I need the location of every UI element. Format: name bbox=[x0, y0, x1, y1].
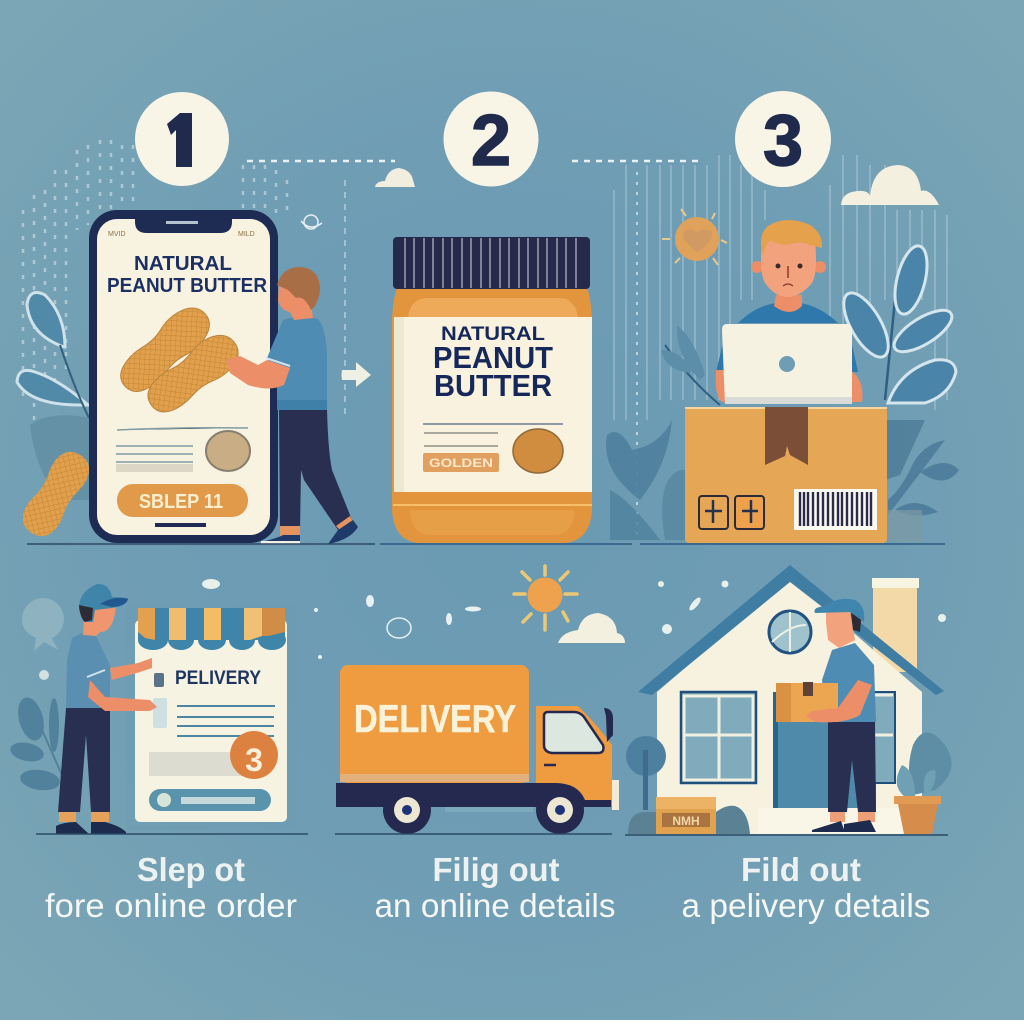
plant bbox=[9, 695, 62, 793]
coin bbox=[206, 431, 250, 471]
person at laptop bbox=[716, 220, 862, 402]
ground line bbox=[625, 834, 948, 836]
step number 1 bbox=[135, 92, 229, 186]
line backdrop: step 3 bbox=[614, 155, 947, 420]
jar label text: PEANUT bbox=[433, 340, 553, 375]
delivery person with parcel bbox=[776, 599, 876, 832]
truck bbox=[336, 665, 619, 834]
caption: Slep ot bbox=[137, 851, 245, 888]
icon: peanut on ground bbox=[16, 445, 96, 543]
phone: NATURAL bbox=[134, 253, 232, 275]
caption: fore online order bbox=[45, 887, 297, 924]
dashed connector: 1 to 2 bbox=[247, 160, 395, 162]
bushes bbox=[712, 806, 750, 834]
potted plant bbox=[894, 732, 952, 834]
ground line bbox=[380, 543, 632, 545]
button bbox=[117, 484, 248, 517]
peanuts bbox=[111, 299, 218, 400]
doodles bbox=[39, 579, 322, 680]
step number 3 bbox=[735, 91, 831, 187]
icon: cloud bbox=[841, 165, 939, 205]
icon: sun bbox=[662, 209, 727, 265]
phone: PEANUT BUTTER bbox=[107, 275, 268, 297]
step number 2: 2 bbox=[471, 101, 511, 181]
arrow bbox=[342, 362, 371, 387]
doodles bbox=[366, 595, 481, 638]
caption: Filig out bbox=[432, 851, 560, 888]
dotted backdrop: step 1 bbox=[23, 140, 287, 420]
speech bubble bbox=[22, 598, 64, 651]
person with phone bbox=[226, 267, 358, 544]
ground line bbox=[27, 543, 375, 545]
caption bbox=[374, 851, 616, 924]
tree bbox=[626, 736, 688, 834]
description lines bbox=[116, 428, 248, 462]
jar body bbox=[392, 287, 592, 543]
panel: step 5 delivery truck bbox=[335, 566, 625, 924]
caption: Fild out bbox=[741, 851, 861, 888]
icon: small cloud bbox=[375, 168, 415, 187]
jar label text: NATURAL bbox=[441, 324, 545, 345]
ground line bbox=[335, 833, 612, 835]
step number 2 bbox=[444, 92, 538, 186]
jar lid bbox=[393, 237, 590, 289]
order card: 3 bbox=[245, 742, 263, 778]
jar label text: BUTTER bbox=[434, 368, 552, 403]
panel: step 6 house delivery bbox=[625, 565, 952, 924]
caption: a pelivery details bbox=[682, 887, 930, 924]
caption: an online details bbox=[374, 887, 616, 924]
dashed vertical guide right bbox=[636, 172, 638, 540]
doodles bbox=[658, 580, 946, 634]
jar label details bbox=[423, 424, 563, 473]
caption bbox=[682, 851, 930, 924]
box bbox=[685, 407, 887, 543]
phone bbox=[89, 210, 278, 543]
order card: PELIVERY bbox=[175, 668, 261, 689]
step number 3: 3 bbox=[763, 101, 803, 181]
dashed connector: 2 to 3 bbox=[572, 160, 700, 162]
crate: NMH bbox=[672, 814, 700, 828]
icon: cloud bbox=[558, 613, 625, 643]
dashed vertical guide bbox=[344, 180, 346, 420]
ground line bbox=[640, 543, 945, 545]
panel: step 1 phone order bbox=[16, 210, 375, 544]
house bbox=[638, 565, 944, 834]
chimney bbox=[872, 578, 919, 672]
laptop bbox=[722, 324, 852, 404]
phone: MVID bbox=[108, 231, 126, 238]
icon: sun bbox=[514, 566, 577, 630]
panel: step 3 person with box bbox=[606, 165, 959, 544]
panel: step 4 delivery man with order card bbox=[9, 579, 322, 924]
order card bbox=[126, 605, 296, 830]
delivery person bbox=[56, 584, 157, 834]
truck: DELIVERY bbox=[354, 698, 516, 741]
plants bbox=[606, 243, 959, 542]
caption bbox=[45, 851, 297, 924]
jar label text bbox=[433, 324, 553, 403]
plant behind phone bbox=[17, 293, 90, 500]
jar label details: GOLDEN bbox=[429, 456, 493, 470]
panel: step 2 jar bbox=[380, 237, 632, 544]
icon: doodle bbox=[301, 215, 322, 229]
phone: MILD bbox=[238, 231, 255, 238]
crate bbox=[656, 797, 716, 834]
phone: SBLEP 11 bbox=[139, 491, 223, 513]
ground line bbox=[36, 833, 308, 835]
